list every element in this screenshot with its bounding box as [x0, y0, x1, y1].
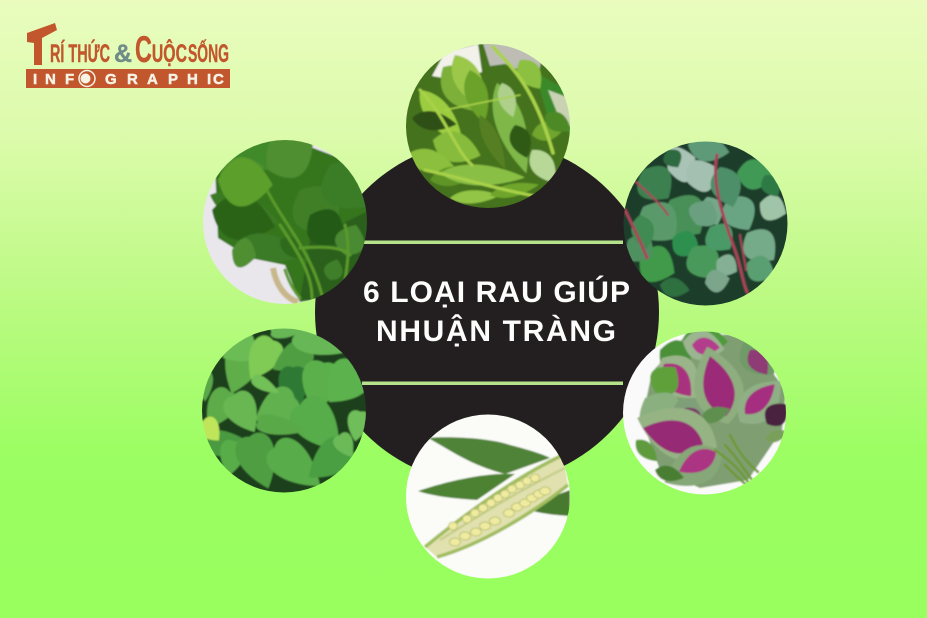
cut okra pod: [425, 455, 568, 557]
photo: upper left vegetable (malabar spinach): [203, 140, 367, 304]
photo: bottom vegetable (okra): [404, 412, 572, 582]
logo: Tri Thuc & Cuoc Song Infographic: [26, 23, 230, 88]
logo wordmark: SỐNG: [188, 38, 229, 68]
logo icon: letter T: [27, 23, 57, 65]
title: [363, 275, 630, 348]
photo: top vegetable (rau muong): [406, 44, 570, 208]
okra seeds: [448, 474, 550, 546]
logo wordmark: CUỘC: [135, 29, 187, 70]
logo wordmark: RÍ THỨC: [50, 38, 110, 68]
logo banner: [26, 69, 230, 88]
photo: lower left vegetable (sweet potato leaves): [202, 328, 366, 492]
title line 1: 6 LOẠI RAU GIÚP: [363, 275, 630, 309]
logo banner text: INFOGRAPHIC: [33, 71, 224, 88]
middle okra pod: [418, 474, 515, 500]
logo wordmark: &: [114, 40, 132, 68]
logo lens icon: [78, 69, 96, 88]
central dark circle: [315, 140, 659, 484]
logo wordmark: [50, 29, 229, 70]
bottom divider: [362, 382, 623, 385]
basket: [273, 268, 298, 302]
photo: lower right vegetable (rau den tia): [623, 332, 786, 494]
rear okra pod end: [530, 490, 570, 516]
upper okra pod: [428, 437, 550, 474]
title line 2: NHUẬN TRÀNG: [376, 314, 616, 348]
photo: upper right vegetable (rau den do): [624, 142, 788, 306]
top divider: [363, 240, 623, 244]
